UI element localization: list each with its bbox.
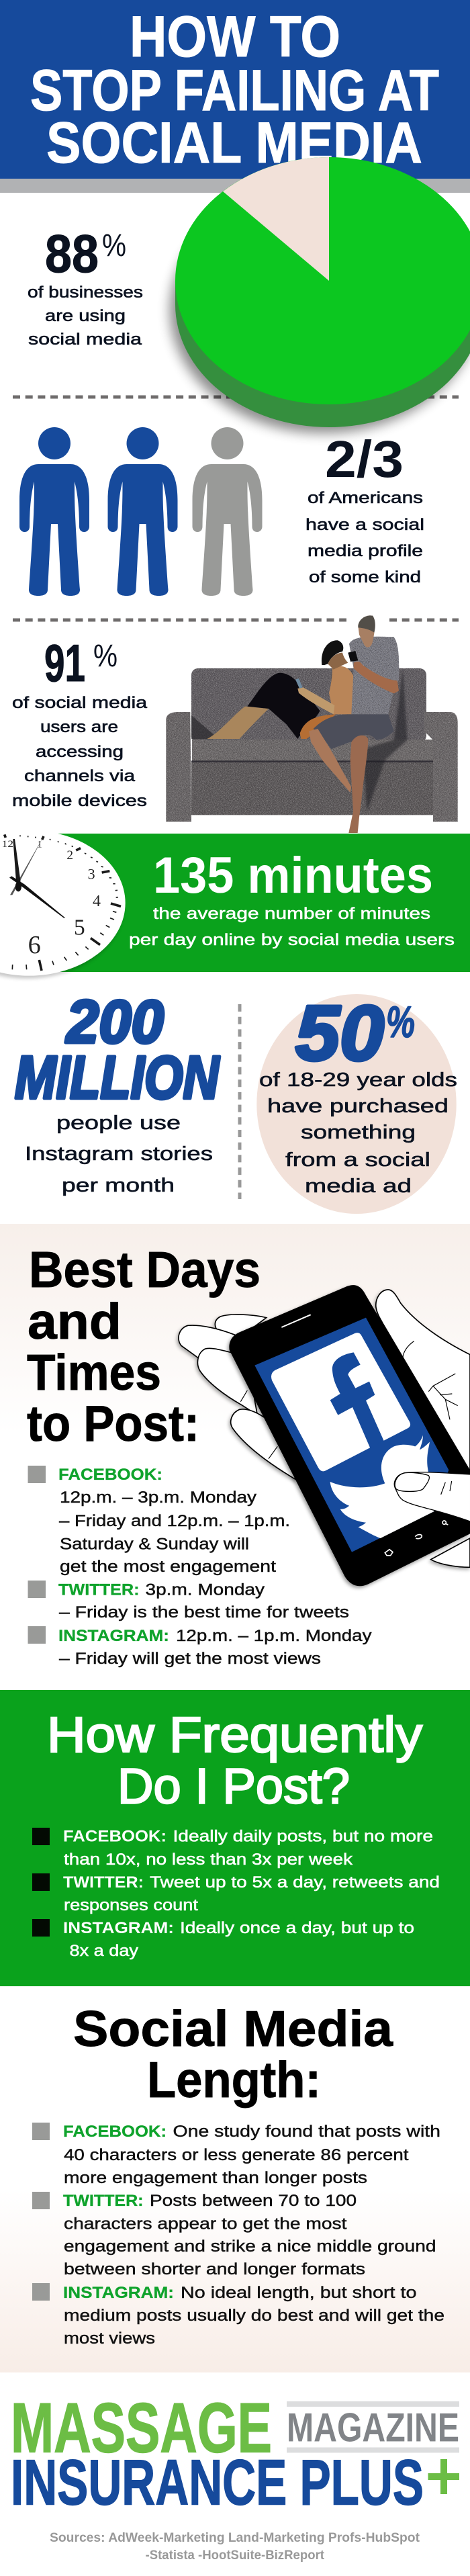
title xyxy=(30,5,439,175)
facebook length: One study found that posts with xyxy=(173,2123,440,2141)
facebook length: FACEBOOK: xyxy=(63,2123,167,2141)
twitter bird xyxy=(330,1435,434,1538)
woman xyxy=(207,640,356,739)
stat: two thirds: media profile xyxy=(308,542,423,560)
stat: 91 percent: mobile devices xyxy=(12,792,147,810)
hand behind phone xyxy=(179,1290,470,1567)
illustration: hand holding phone with facebook and twitter xyxy=(179,1285,470,1586)
stat: 200 million xyxy=(15,989,220,1196)
twitter times xyxy=(58,1581,349,1622)
facebook times xyxy=(58,1466,290,1576)
callout: 50 percent xyxy=(256,989,457,1214)
stat: 91 percent: channels via xyxy=(24,767,136,785)
stat: two thirds: have a social xyxy=(306,516,424,534)
twitter times: 3p.m. Monday xyxy=(145,1581,265,1599)
stat: two thirds: of Americans xyxy=(308,489,423,507)
heading: social media length: Length: xyxy=(147,2051,321,2108)
caption: per day online by social media users xyxy=(129,931,455,949)
stat: 200 million: per month xyxy=(62,1175,175,1196)
callout: 50 percent: 50 xyxy=(295,989,384,1077)
twitter frequency xyxy=(63,1873,440,1914)
facebook times: FACEBOOK: xyxy=(58,1466,162,1484)
facebook f xyxy=(330,1352,384,1449)
stat: 88 percent: 88 xyxy=(45,224,99,283)
finger over phone xyxy=(394,1472,470,1521)
facebook times: – Friday and 12p.m. – 1p.m. xyxy=(59,1512,290,1530)
icon: three people, two of three highlighted xyxy=(19,427,262,596)
twitter times: TWITTER: xyxy=(58,1581,140,1599)
twitter length: Posts between 70 to 100 xyxy=(150,2192,357,2210)
icon: clock: 2 xyxy=(66,848,73,862)
bullet twitter xyxy=(32,2192,50,2209)
divider 1 xyxy=(13,395,459,399)
bullet twitter xyxy=(32,1873,50,1891)
hand creases xyxy=(240,1341,458,1495)
pie chart 88 percent xyxy=(170,157,470,433)
callout: 50 percent: have purchased xyxy=(267,1096,449,1117)
facebook frequency: Ideally daily posts, but no more xyxy=(173,1827,433,1846)
facebook times: 12p.m. – 3p.m. Monday xyxy=(60,1489,256,1507)
stat: 91 percent: users are xyxy=(40,718,118,736)
stat: 91 percent xyxy=(12,633,148,810)
stat: two thirds: 2/3 xyxy=(325,431,404,488)
caption: the average number of minutes xyxy=(153,905,430,923)
facebook times: Saturday & Sunday will xyxy=(60,1536,249,1553)
stat: two thirds xyxy=(306,431,424,586)
stat: 200 million: MILLION xyxy=(15,1045,220,1112)
icon: clock: 12 xyxy=(2,839,13,850)
stat: 91 percent: accessing xyxy=(36,743,124,761)
twitter times: – Friday is the best time for tweets xyxy=(59,1603,349,1622)
bullet facebook xyxy=(32,2123,50,2140)
stat: 91 percent: % xyxy=(93,637,117,673)
stat: 200 million: Instagram stories xyxy=(25,1143,213,1165)
twitter length: engagement and strike a nice middle ground xyxy=(64,2237,436,2256)
panel: best days and times background xyxy=(0,1224,470,1690)
callout: 50 percent: something xyxy=(301,1122,416,1143)
heading xyxy=(47,1707,422,1814)
instagram length: INSTAGRAM: xyxy=(63,2284,174,2302)
heading: Do I Post? xyxy=(117,1759,350,1814)
instagram frequency: 8x a day xyxy=(70,1942,138,1960)
stat: 91 percent: of social media xyxy=(12,694,148,712)
twitter length: between shorter and longer formats xyxy=(64,2260,365,2278)
facebook length: more engagement than longer posts xyxy=(64,2169,367,2187)
title: HOW TO xyxy=(130,5,340,69)
instagram length: medium posts usually do best and will get the xyxy=(64,2307,444,2325)
title: SOCIAL MEDIA xyxy=(46,111,422,175)
facebook times: get the most engagement xyxy=(60,1558,276,1576)
bullet instagram xyxy=(32,2283,50,2301)
twitter frequency: TWITTER: xyxy=(63,1873,144,1892)
stat: 88 percent xyxy=(28,224,143,349)
twitter length xyxy=(63,2192,436,2278)
icon: clock: 3 xyxy=(88,865,95,882)
stat: 91 percent: 91 xyxy=(44,633,85,693)
divider 2 xyxy=(13,618,459,622)
stat: 200 million: 200 xyxy=(65,989,164,1056)
instagram times: 12p.m. – 1p.m. Monday xyxy=(176,1627,372,1645)
callout: 50 percent: of 18-29 year olds xyxy=(259,1069,457,1091)
instagram frequency: Ideally once a day, but up to xyxy=(180,1919,414,1937)
panel: social media length background xyxy=(0,2190,470,2372)
illustration: couple on sofa using phones xyxy=(166,615,458,833)
heading: How Frequently xyxy=(47,1707,422,1763)
list: best posting times xyxy=(28,1466,372,1668)
instagram length: most views xyxy=(64,2329,155,2348)
logo: massage magazine insurance plus xyxy=(11,2389,459,2519)
heading: best days and times to post: Times xyxy=(27,1344,161,1401)
instagram frequency: INSTAGRAM: xyxy=(63,1919,174,1937)
stat: 200 million: people use xyxy=(56,1112,181,1134)
heading: best days and times to post: Best Days xyxy=(29,1241,261,1298)
icon: clock: 4 xyxy=(93,893,101,910)
facebook frequency xyxy=(63,1827,433,1869)
heading: social media length: Social Media xyxy=(73,2000,393,2057)
facebook frequency: than 10x, no less than 3x per week xyxy=(64,1851,353,1869)
twitter frequency: responses count xyxy=(64,1896,198,1914)
icon: clock: 5 xyxy=(74,916,85,940)
instagram times xyxy=(58,1627,372,1668)
facebook length xyxy=(63,2123,440,2187)
stat: 88 percent: social media xyxy=(28,330,142,349)
header band xyxy=(0,0,470,193)
twitter length: characters appear to get the most xyxy=(64,2215,347,2233)
stat: 88 percent: of businesses xyxy=(28,283,143,302)
bullet facebook xyxy=(32,1828,50,1845)
phone buttons xyxy=(385,1521,448,1556)
icon: clock xyxy=(0,830,126,979)
bullet twitter xyxy=(28,1581,46,1598)
instagram times: – Friday will get the most views xyxy=(59,1650,321,1668)
instagram length xyxy=(63,2284,444,2348)
phone xyxy=(229,1285,470,1586)
divider vertical xyxy=(238,1004,242,1199)
bullet instagram xyxy=(32,1919,50,1937)
band: 135 minutes xyxy=(0,834,470,972)
bullet facebook xyxy=(28,1466,46,1483)
list: post length xyxy=(32,2123,444,2348)
twitter frequency: Tweet up to 5x a day, retweets and xyxy=(150,1873,440,1892)
facebook length: 40 characters or less generate 86 percent xyxy=(64,2146,409,2164)
facebook tile xyxy=(271,1333,410,1471)
sources xyxy=(50,2531,420,2563)
caption xyxy=(129,905,455,949)
twitter length: TWITTER: xyxy=(63,2192,144,2210)
stat: two thirds: of some kind xyxy=(309,568,421,586)
icon: clock: 6 xyxy=(28,931,41,959)
sources: Sources: AdWeek-Marketing Land-Marketing Profs-HubSpot xyxy=(50,2531,420,2545)
heading: best days and times to post: and xyxy=(28,1293,122,1349)
man xyxy=(309,615,399,833)
sources: -Statista -HootSuite-BizReport xyxy=(145,2548,325,2563)
heading: best days and times to post xyxy=(27,1241,261,1452)
facebook frequency: FACEBOOK: xyxy=(63,1827,167,1846)
callout: 50 percent: from a social xyxy=(285,1149,430,1171)
instagram length: No ideal length, but short to xyxy=(181,2284,416,2302)
callout: 50 percent: % xyxy=(386,997,415,1047)
instagram frequency xyxy=(63,1919,414,1960)
panel: how frequently xyxy=(0,1690,470,1986)
callout: 50 percent: media ad xyxy=(305,1175,412,1197)
stat: 88 percent: % xyxy=(102,227,126,263)
logo: massage magazine insurance plus: MASSAGE xyxy=(11,2389,272,2468)
big number: 135 minutes xyxy=(153,847,433,904)
sofa xyxy=(166,668,458,821)
icon: clock: 1 xyxy=(37,840,42,850)
stat: 88 percent: are using xyxy=(45,307,126,325)
heading: social media length xyxy=(73,2000,393,2108)
bullet instagram xyxy=(28,1626,46,1644)
heading: best days and times to post: to Post: xyxy=(27,1395,199,1452)
instagram times: INSTAGRAM: xyxy=(58,1627,169,1645)
